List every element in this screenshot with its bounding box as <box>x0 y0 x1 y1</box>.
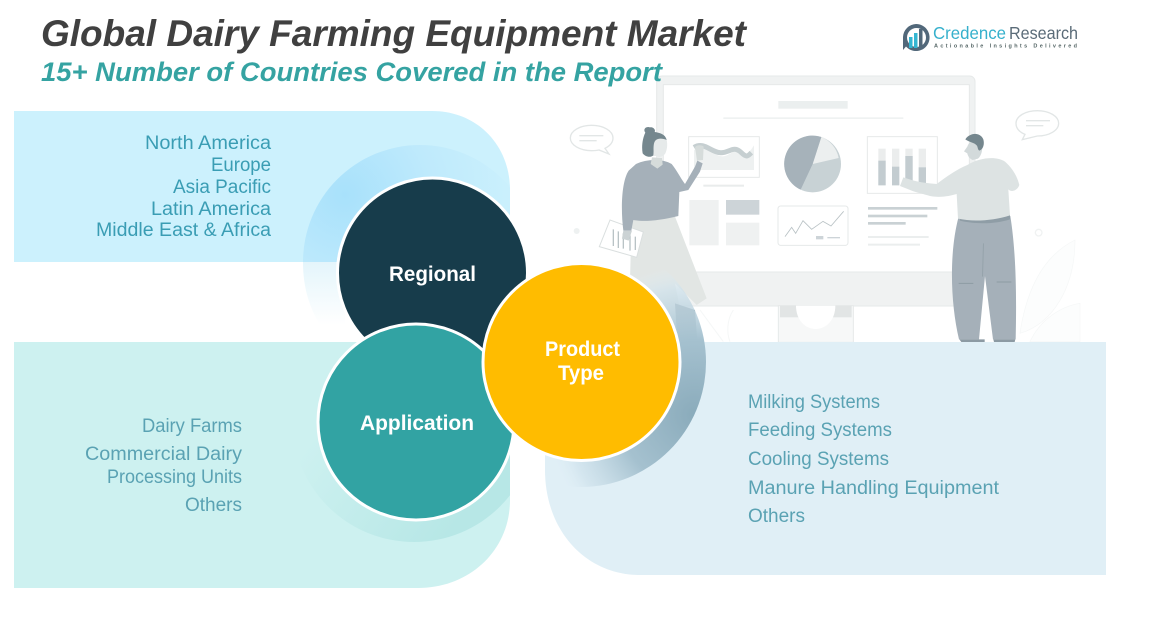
circle: Regional: Regional <box>389 263 476 286</box>
man figure <box>900 134 1019 342</box>
monitor <box>657 76 975 342</box>
text block: product type list: Manure Handling Equipment <box>748 478 1000 499</box>
chart: pie <box>784 136 841 192</box>
panel: application list background <box>14 342 510 588</box>
text block: regional list: Latin America <box>151 199 271 220</box>
panel: product type list background <box>545 342 1106 575</box>
circle: Regional <box>338 178 528 368</box>
text block: application list: Dairy Farms <box>142 416 242 437</box>
text block: application list <box>85 416 243 516</box>
arc: application <box>336 455 510 542</box>
logo: Credence Research <box>903 23 1078 51</box>
logo: Credence Research: Actionable Insights Delivered <box>934 44 1077 50</box>
arc: regional <box>303 145 464 306</box>
text block: regional list <box>96 133 271 241</box>
text block: product type list <box>748 392 1000 527</box>
circle: Application <box>318 324 514 520</box>
logo: Credence Research: Credence <box>933 23 1006 43</box>
text block: regional list: Middle East & Africa <box>96 220 271 241</box>
circle: Product Type: Type <box>558 362 604 385</box>
text block: product type list: Cooling Systems <box>748 449 889 470</box>
text block: application list: Processing Units <box>107 467 242 488</box>
speech bubble left <box>570 125 613 154</box>
text block: product type list: Milking Systems <box>748 392 880 413</box>
faint leaves <box>1020 240 1080 342</box>
text block: product type list: Others <box>748 506 805 527</box>
chart: blocks <box>689 200 759 245</box>
text block: product type list: Feeding Systems <box>748 420 892 441</box>
chart: area wave <box>689 137 759 187</box>
text block: regional list: North America <box>145 133 271 154</box>
speech bubble right <box>1016 111 1059 140</box>
panel: regional list background <box>14 111 510 262</box>
subtitle: 15+ Number of Countries Covered in the Report <box>41 57 663 87</box>
chart: stacked bars <box>867 137 937 193</box>
icon: logo mark <box>903 24 930 51</box>
text block: regional list: Asia Pacific <box>173 177 271 198</box>
logo: Credence Research: Research <box>1009 23 1078 43</box>
arc: product type <box>456 237 706 487</box>
title: Global Dairy Farming Equipment Market <box>41 13 748 54</box>
woman figure <box>599 127 707 342</box>
text block: application list: Commercial Dairy <box>85 444 243 465</box>
circle: Product Type <box>483 264 680 460</box>
text block: application list: Others <box>185 495 242 516</box>
circle: Product Type: Product <box>545 338 620 361</box>
illustration: presenters at dashboard monitor <box>570 76 1080 342</box>
chart: line <box>778 206 848 245</box>
text lines <box>868 207 937 246</box>
text block: regional list: Europe <box>211 155 271 176</box>
circle: Application: Application <box>360 412 474 435</box>
